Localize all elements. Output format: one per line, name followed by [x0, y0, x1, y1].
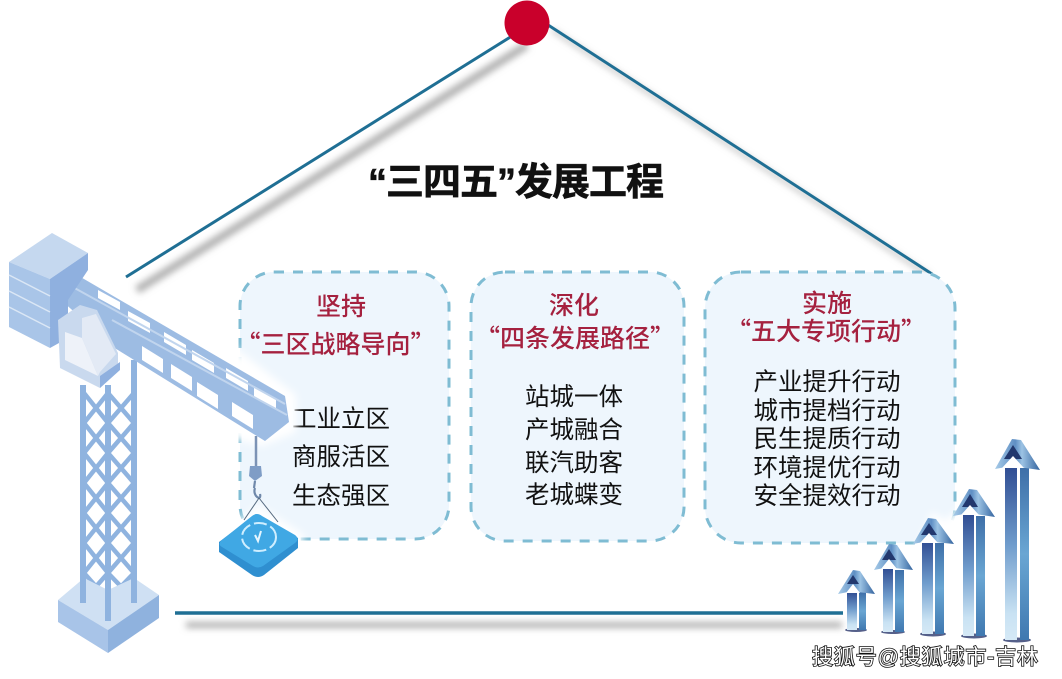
arrow 2: [874, 544, 913, 634]
arrow 1: [838, 570, 875, 632]
panel: 五大专项行动: [705, 272, 955, 543]
crane white halo: [210, 340, 304, 590]
house roof and floor lines: [126, 23, 932, 625]
panel background: [240, 272, 449, 539]
crane hook: [244, 436, 278, 522]
icon: tower crane: [9, 233, 304, 653]
roof apex red dot: [504, 0, 550, 46]
panel list: 工业立区: [292, 405, 390, 433]
panel list: 城市提档行动: [754, 397, 900, 425]
panel list: 联汽助客: [525, 449, 623, 477]
panel heading: [726, 284, 926, 348]
panel heading: “五大专项行动”: [726, 312, 926, 348]
arrow 4: [953, 489, 995, 638]
panel list: [292, 405, 390, 510]
panel heading: “三区战略导向”: [235, 325, 436, 361]
panel list: 站城一体: [525, 383, 623, 411]
panel heading: [475, 286, 675, 355]
title: “三四五”发展工程: [368, 162, 664, 204]
panel list: 产业提升行动: [754, 368, 900, 396]
panel list: 产城融合: [525, 416, 623, 444]
panel list: 生态强区: [292, 482, 390, 510]
panel list: 环境提优行动: [754, 454, 900, 482]
panel background: [471, 272, 684, 541]
watermark: 搜狐号@搜狐城市-吉林: [812, 646, 1038, 669]
panel heading: [235, 287, 436, 361]
panel list: 老城蝶变: [525, 481, 623, 509]
panel list: [754, 368, 900, 510]
panel: 四条发展路径: [471, 272, 684, 541]
panel list: 民生提质行动: [754, 425, 900, 453]
crane counterweight: [9, 233, 88, 348]
icon: rising arrows: [838, 439, 1040, 642]
white halo behind arrows: [918, 485, 1000, 560]
arrow 3: [913, 518, 954, 636]
crane boom: [50, 272, 289, 441]
panel heading: “四条发展路径”: [475, 319, 675, 355]
panel background: [705, 272, 955, 543]
crane mast: [83, 360, 134, 620]
crane cabin: [58, 305, 120, 388]
icon: clock load: [219, 514, 298, 577]
arrow 5: [995, 439, 1040, 642]
panel: 三区战略导向: [235, 272, 449, 539]
panel list: 安全提效行动: [754, 482, 900, 510]
panel heading: 深化: [549, 286, 599, 322]
panel heading: 实施: [802, 284, 852, 320]
panel list: [525, 383, 623, 509]
panel list: 商服活区: [292, 443, 390, 471]
panel heading: 坚持: [316, 287, 366, 323]
crane base: [58, 575, 159, 653]
